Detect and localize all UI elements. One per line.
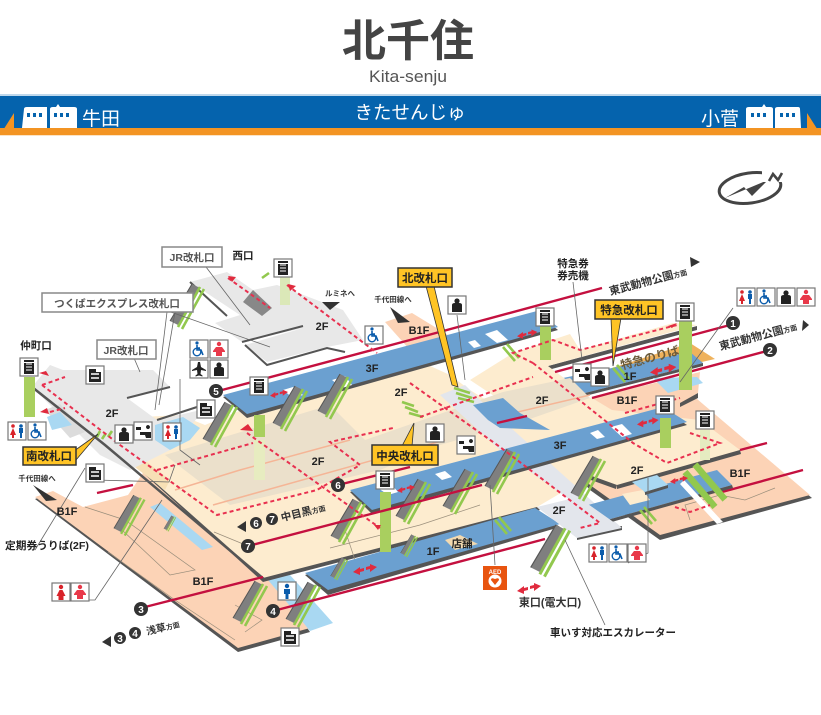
pillars: elevators xyxy=(24,277,710,552)
label: Chiyoda line south: 千代田線へ xyxy=(18,473,56,483)
band: 3F north xyxy=(223,311,558,418)
label: JR gate south: JR改札口 xyxy=(104,344,148,357)
platform numbers: 7 xyxy=(245,542,251,553)
direction: Asakusa: 4 xyxy=(132,629,138,640)
direction: Asakusa: 3 xyxy=(117,634,123,645)
label: wheelchair escalator: 車いす対応エスカレーター xyxy=(550,626,676,639)
label: express ticket machine: 特急券 xyxy=(557,257,589,270)
icons: elevators xyxy=(20,259,714,489)
label: west exit: 西口 xyxy=(232,250,254,262)
label: JR gate west: JR改札口 xyxy=(170,251,214,264)
icons: stairs xyxy=(86,366,299,646)
icon: AED: AED xyxy=(489,570,502,576)
label: express ticket machine: 券売機 xyxy=(557,269,589,282)
direction: Nakameguro: 6 xyxy=(253,519,259,530)
line 2 xyxy=(592,351,767,398)
plate: west gray 2F xyxy=(190,272,363,365)
floor labels: 2F xyxy=(631,465,644,477)
direction: Nakameguro xyxy=(237,501,327,532)
floor labels: 3F xyxy=(554,440,567,452)
platform numbers xyxy=(134,316,777,618)
line band xyxy=(0,94,821,136)
label: Chiyoda line north: 千代田線へ xyxy=(374,294,412,304)
floor labels: 2F xyxy=(553,505,566,517)
title: 北千住 xyxy=(342,17,474,66)
icon: compass xyxy=(717,169,784,207)
plate: B1F upper middle xyxy=(385,313,448,350)
floor labels: 2F xyxy=(536,395,549,407)
floor labels: 2F xyxy=(316,321,329,333)
band: 3F south xyxy=(350,407,687,514)
floor labels: B1F xyxy=(730,468,751,480)
floor labels: B1F xyxy=(57,506,78,518)
direction: Tobu Dobutsu Koen 1 xyxy=(608,257,700,298)
line 3 stub xyxy=(97,485,133,493)
direction arrows xyxy=(39,276,688,594)
icon: trains right xyxy=(746,104,801,128)
icon: AED xyxy=(483,566,507,590)
label: commuter ticket: 定期券うりば(2F) xyxy=(5,539,89,552)
floor labels: 1F xyxy=(427,546,440,558)
callout: express gate: 特急改札口 xyxy=(600,303,658,317)
platform numbers: 4 xyxy=(270,607,276,618)
label: east exit: 東口(電大口) xyxy=(519,595,581,609)
floor labels: 2F xyxy=(106,408,119,420)
line 5 xyxy=(222,288,602,390)
floor labels: B1F xyxy=(617,395,638,407)
platform numbers: 2 xyxy=(767,346,773,357)
dashed routes xyxy=(42,278,720,528)
plate: special express platform xyxy=(548,326,715,412)
platform numbers: 3 xyxy=(138,605,144,616)
label: express platform: 特急のりば xyxy=(619,343,681,373)
line 4 right end xyxy=(722,470,803,492)
line 3 xyxy=(145,577,263,607)
floor labels: 1F xyxy=(624,371,637,383)
label: Tsukuba Express gate: つくばエクスプレス改札口 xyxy=(54,297,180,310)
label: shops: 店舗 xyxy=(452,537,473,550)
line 6 xyxy=(342,467,410,484)
direction: Asakusa: 浅草方面 xyxy=(145,617,181,638)
plate: lower right tan xyxy=(500,392,741,489)
callout: south gate: 南改札口 xyxy=(26,449,72,463)
band: 1F south xyxy=(305,508,560,595)
plate: B1F left xyxy=(35,470,333,652)
gate stripes xyxy=(97,273,474,439)
floor labels: 2F xyxy=(312,456,325,468)
label: Lumine: ルミネへ xyxy=(325,289,355,298)
plate: main tan 2F xyxy=(85,350,600,582)
previous station: 牛田 xyxy=(82,108,120,130)
floor labels: B1F xyxy=(409,325,430,337)
floor labels: 3F xyxy=(366,363,379,375)
plate gray east xyxy=(537,497,622,538)
label: JR gate south xyxy=(97,340,156,359)
plate: upper tan xyxy=(470,323,697,400)
line 1 xyxy=(555,325,730,372)
direction: Tobu Dobutsu Koen 2: 東武動物公園方面 xyxy=(718,319,798,353)
icon: trains left xyxy=(22,104,77,128)
callout: north gate xyxy=(398,268,458,387)
callout: central gate xyxy=(372,423,438,465)
direction: Tobu Dobutsu Koen 1: 東武動物公園方面 xyxy=(608,264,688,298)
direction: Nakameguro: 中目黒方面 xyxy=(279,501,327,524)
callout: express gate xyxy=(595,300,663,366)
label: Tsukuba Express gate xyxy=(42,293,193,312)
platform numbers: 1 xyxy=(730,319,736,330)
callout: north gate: 北改札口 xyxy=(402,271,448,285)
floor labels: B1F xyxy=(193,576,214,588)
platform numbers: 6 xyxy=(335,481,341,492)
hiragana name: きたせんじゅ xyxy=(354,102,466,123)
plate: blue center xyxy=(473,398,550,430)
romaji station name: Kita-senju xyxy=(369,67,447,86)
label: Lumine xyxy=(322,289,355,310)
label: Chiyoda line north xyxy=(374,294,412,323)
line 7 xyxy=(252,485,482,545)
escalators xyxy=(114,284,725,627)
direction: Nakameguro: 7 xyxy=(269,515,275,526)
callout: central gate: 中央改札口 xyxy=(376,449,434,463)
floor plan xyxy=(24,263,812,652)
platform numbers: 5 xyxy=(213,387,219,398)
plate: center gray strip xyxy=(440,385,622,540)
next station: 小菅 xyxy=(701,108,739,130)
label: JR gate west xyxy=(162,247,222,267)
plate: south gray 2F xyxy=(32,365,265,580)
icons: facilities xyxy=(8,288,815,601)
label: Nakacho exit: 仲町口 xyxy=(20,339,52,352)
line 4 xyxy=(277,539,545,610)
leader lines xyxy=(35,263,733,625)
floor labels xyxy=(57,321,751,588)
floor labels: 2F xyxy=(395,387,408,399)
plate: B1F right xyxy=(520,393,812,540)
callout: south gate xyxy=(23,434,98,465)
label: Chiyoda line south xyxy=(18,473,57,501)
band: 2F right xyxy=(588,470,733,524)
label: express ticket machine xyxy=(557,257,589,282)
direction: Asakusa xyxy=(102,617,181,647)
